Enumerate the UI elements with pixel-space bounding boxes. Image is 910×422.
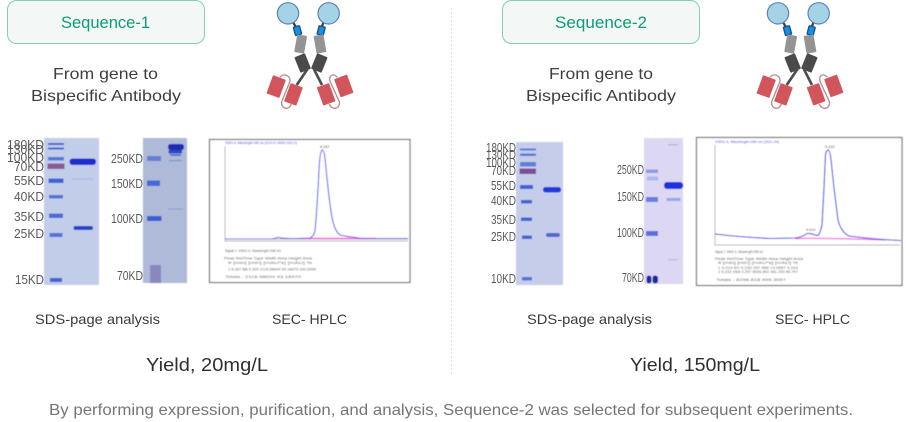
chart: SEC-HPLC sequence 1: Peak RetTime Type Width Area Height Area [224,256,313,260]
gel labels: sequence 2 SDS-page left: 25KD [491,230,516,244]
gel labels: sequence 1 SDS-page left: 180KD [7,138,44,152]
gel labels: sequence 2 SDS-page left: 100KD [486,156,516,170]
chart: SEC-HPLC sequence 2: 2 5.233 VBA 0.257 8040.852 481.253 96.757 [718,269,799,274]
gel labels: sequence 1 SDS-page right: 100KD [111,212,143,226]
gel labels: sequence 2 SDS-page right: 150KD [617,190,644,204]
caption: SEC-HPLC: SEC- HPLC [272,311,347,327]
gel: SDS-page reduced ladder and bands [143,138,187,283]
gel labels: sequence 1 SDS-page left: 25KD [14,227,44,241]
heading: Sequence-1: Sequence-1 [61,13,150,32]
chart: SEC-HPLC sequence 2: Peak RetTime Type Width Area Height Area [715,256,804,261]
gel labels: sequence 1 SDS-page left: 15KD [15,273,44,287]
text: from gene to bispecific antibody [526,66,676,105]
caption: SEC-HPLC: SEC- HPLC [775,311,850,327]
gel labels: sequence 1 SDS-page right: 150KD [111,177,143,191]
text: from gene to bispecific antibody: Bispecific Antibody [31,88,181,105]
conclusion text: By performing expression, purification, and analysis, Sequence-2 was selected for subsequent experiments. [49,402,853,419]
gel labels: sequence 1 SDS-page left: 55KD [14,174,44,188]
chart: SEC-HPLC sequence 2: Signal 1: VWD1 A, Wavelength=280 nm [715,249,763,254]
icon: bispecific antibody [756,3,844,108]
text: from gene to bispecific antibody: From gene to [549,66,653,83]
chart: SEC-HPLC sequence 2: 4.014 [806,228,816,232]
gel labels: sequence 1 SDS-page left: 100KD [7,151,44,165]
chart: SEC-HPLC sequence 1 [210,140,410,282]
chart: SEC-HPLC sequence 2 [696,138,902,286]
caption: SDS-page analysis: SDS-page analysis [35,311,160,327]
gel labels: sequence 1 SDS-page left: 35KD [14,210,44,224]
icon: bispecific antibody [266,3,354,108]
gel labels: sequence 2 SDS-page left: 70KD [491,164,516,178]
chart: SEC-HPLC sequence 1: Totals : 2116.98004 93.18470 [225,274,302,279]
gel labels: sequence 2 SDS-page left: 130KD [486,148,516,162]
chart: SEC-HPLC sequence 1: Signal 1: VWD1 A, Wavelength=280 nm [225,248,282,253]
text: from gene to bispecific antibody: From gene to [53,66,158,83]
gel labels: sequence 2 SDS-page left: 35KD [491,213,516,227]
gel labels: sequence 2 SDS-page left: 55KD [491,179,516,193]
chart: SEC-HPLC sequence 2: Totals : 8298.818 495.3097 [716,277,787,282]
text: from gene to bispecific antibody [31,66,181,105]
gel labels: sequence 1 SDS-page left: 40KD [14,190,44,204]
gel labels: sequence 1 SDS-page left [7,138,44,287]
yield: sequence 2: Yield, 150mg/L [630,355,760,375]
chart: SEC-HPLC sequence 2: # [min] [min] [mAU*s] [mAU] % [718,260,799,265]
chart: SEC-HPLC sequence 2: VWD1 A, Wavelength=280 nm (2021-04) [715,140,780,144]
gel labels: sequence 2 SDS-page left: 40KD [491,194,516,208]
gel labels: sequence 1 SDS-page right: 70KD [117,269,143,283]
gel labels: sequence 1 SDS-page left: 70KD [14,160,44,174]
chart: SEC-HPLC sequence 2: 5.233 [825,145,835,149]
gel labels: sequence 2 SDS-page left: 180KD [486,141,516,155]
chart: SEC-HPLC sequence 1: VWD1 A, Wavelength=280 nm (2019-07-18\002-0201.D) [225,141,298,145]
gel labels: sequence 2 SDS-page right: 250KD [617,163,644,177]
heading: Sequence-2 [502,0,700,44]
yield: sequence 1: Yield, 20mg/L [146,355,268,375]
gel: SDS-page reduced ladder and bands [644,138,683,284]
chart: SEC-HPLC sequence 1: 8.287 [320,145,330,149]
gel labels: sequence 2 SDS-page right: 100KD [617,226,644,240]
gel labels: sequence 1 SDS-page right [111,152,143,283]
chart: SEC-HPLC sequence 1: # [min] [min] [mAU*s] [mAU] % [228,260,313,265]
gel labels: sequence 2 SDS-page left: 10KD [491,272,516,286]
panel: sequence 2 [486,0,902,375]
gel labels: sequence 2 SDS-page right [617,163,644,285]
text: from gene to bispecific antibody: Bispecific Antibody [526,88,676,105]
chart: SEC-HPLC sequence 1: 1 8.287 BB 0.303 2116.98004 93.18470 100.0000 [228,266,317,272]
gel labels: sequence 1 SDS-page left: 130KD [7,143,44,157]
chart: SEC-HPLC sequence 2: 1 4.014 BV 0.230 257.966 14.0567 3.243 [718,265,799,270]
gel labels: sequence 2 SDS-page right: 70KD [622,271,644,285]
caption: SDS-page analysis: SDS-page analysis [527,311,652,327]
gel: SDS-page non-reduced ladder and bands [44,138,99,285]
gel: SDS-page non-reduced ladder and bands [516,142,563,285]
heading: Sequence-2: Sequence-2 [555,13,647,32]
gel labels: sequence 2 SDS-page left [486,141,516,286]
heading: Sequence-1 [8,0,204,44]
gel labels: sequence 1 SDS-page right: 250KD [111,152,143,166]
panel: sequence 1 [7,0,410,375]
